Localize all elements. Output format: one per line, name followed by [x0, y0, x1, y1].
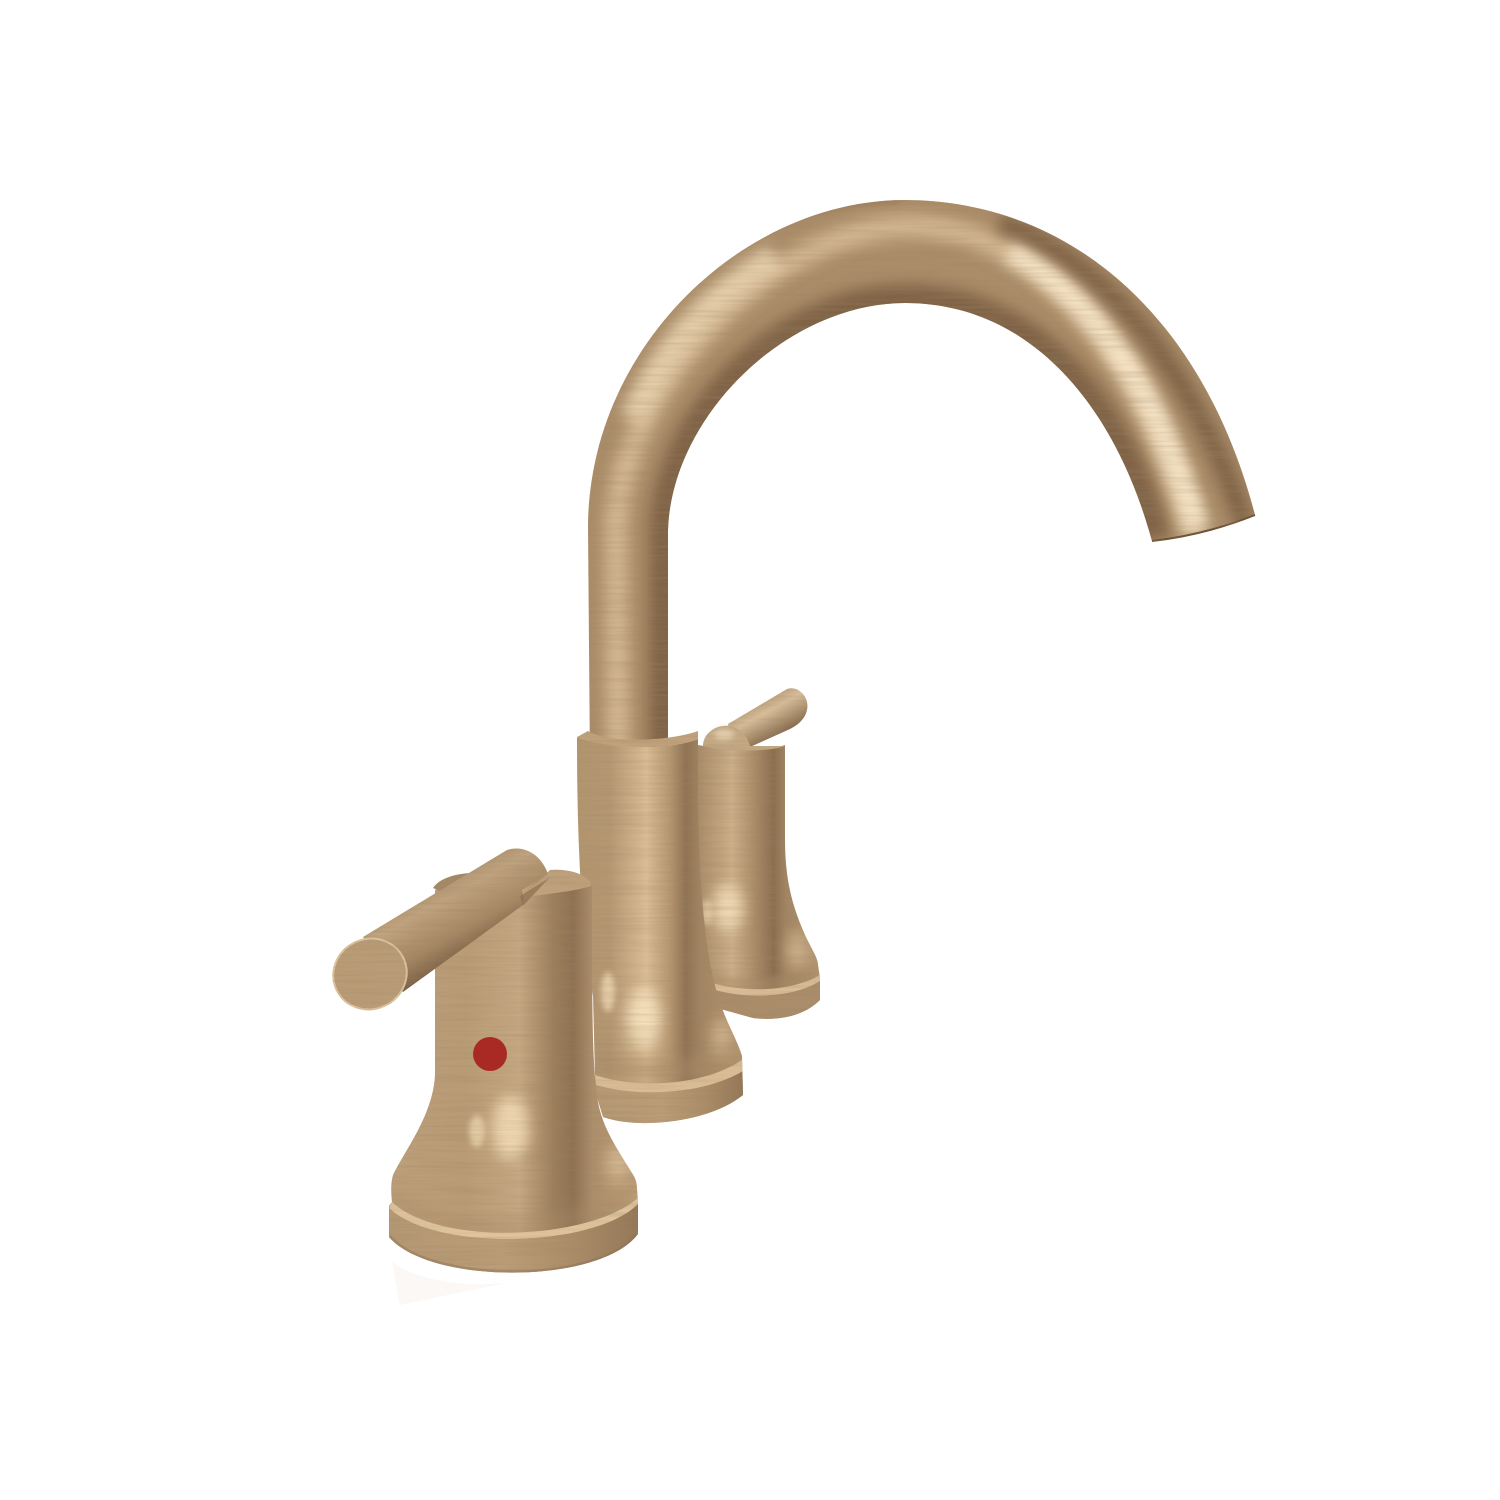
collar top rim: [577, 731, 698, 747]
rear handle: [698, 688, 820, 1021]
spout: [588, 200, 1255, 765]
front lever: [322, 848, 549, 1021]
faucet illustration: [332, 200, 1256, 1305]
hot indicator dot: [473, 1037, 507, 1071]
handle top face: [520, 870, 591, 900]
rear lever hub: [703, 726, 785, 750]
faucet body: [322, 200, 1255, 1273]
faint reflection: [392, 1262, 510, 1305]
lever end cap: [322, 927, 418, 1021]
front handle body: [389, 870, 638, 1273]
rear lever stub: [433, 873, 470, 893]
center collar base: [577, 731, 743, 1124]
rear lever: [728, 688, 807, 747]
